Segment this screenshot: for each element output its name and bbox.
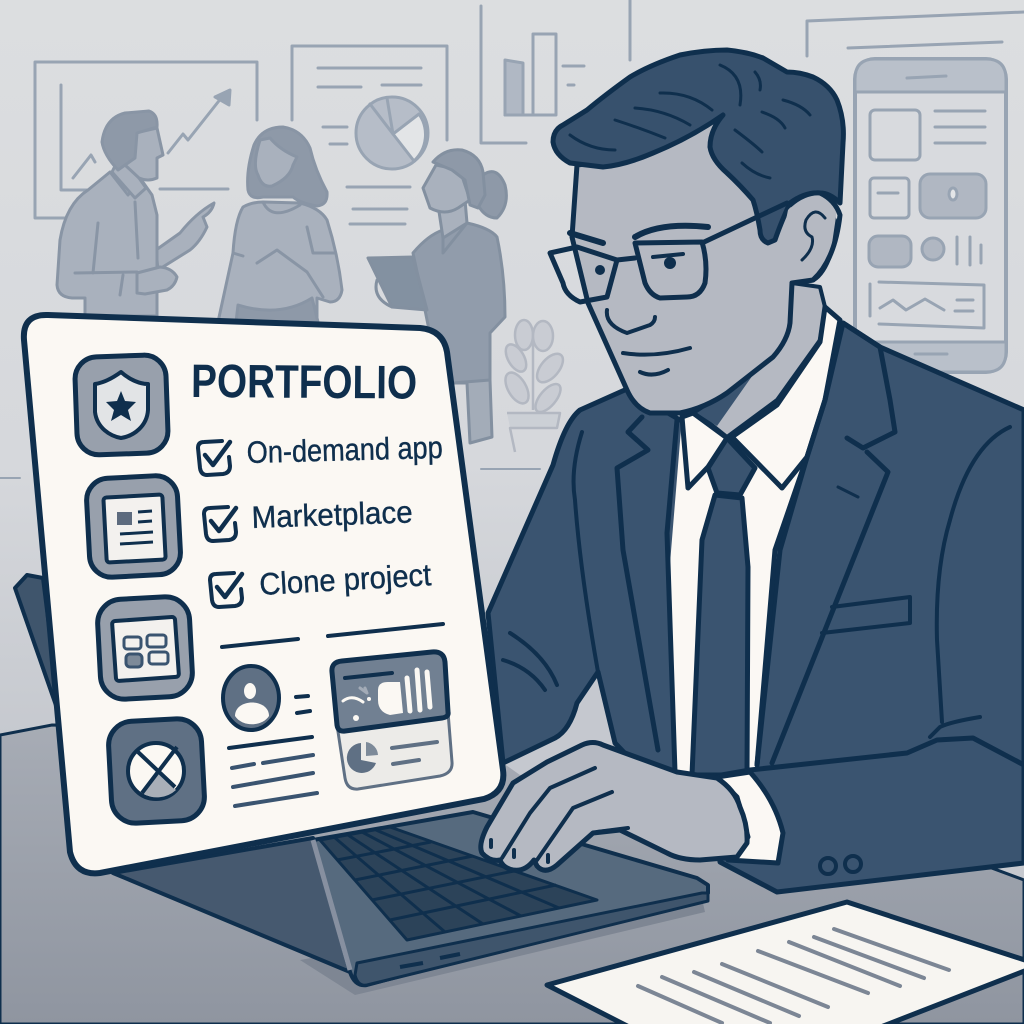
hair: [248, 127, 327, 206]
man figure: [488, 50, 1024, 892]
wall chart board: [35, 62, 257, 218]
checklist item: on-demand app: On-demand app: [246, 430, 443, 470]
suit jacket: [488, 323, 1024, 800]
neck: [112, 160, 146, 198]
background plant: [501, 320, 568, 452]
fingernails: [491, 840, 548, 862]
grid icon: [96, 596, 194, 700]
bar chart frame: [481, 0, 630, 143]
hand on keyboard: [481, 742, 783, 870]
shirt: [57, 172, 157, 316]
eyes: [595, 254, 683, 275]
hair: [102, 111, 157, 170]
laptop base left: [113, 838, 350, 972]
skirt and legs: [440, 330, 492, 443]
laptop base: [313, 812, 708, 985]
ponytail: [478, 172, 506, 218]
face: [255, 138, 297, 186]
sleeve buttons: [820, 856, 861, 874]
keyboard: [320, 827, 597, 940]
paper on desk: [547, 902, 1024, 1024]
front hand: [137, 267, 177, 294]
hinge: [313, 840, 350, 970]
left jacket fold: [574, 432, 598, 672]
shirt: [667, 400, 825, 775]
checklist item: marketplace: [204, 494, 413, 541]
neck: [438, 200, 467, 238]
laptop: [15, 575, 708, 995]
profile block: [223, 666, 317, 806]
background office scene: [0, 0, 1024, 478]
buttonhole: [838, 487, 858, 497]
neck shadow: [697, 362, 762, 426]
finger lines: [502, 768, 628, 860]
laptop front lip: [355, 893, 708, 985]
divider lines: [222, 624, 443, 647]
heading: portfolio: PORTFOLIO: [191, 354, 417, 409]
dashboard card: [332, 652, 452, 789]
neck: [697, 283, 825, 437]
face: [125, 128, 163, 180]
ear: [780, 193, 840, 283]
tablet: [368, 257, 427, 310]
pie chart: [356, 97, 428, 169]
nose and mouth: [607, 310, 690, 375]
wall lines: [0, 469, 540, 478]
checklist item: clone project: Clone project: [258, 557, 432, 602]
shirt detail lines: [75, 202, 138, 295]
hair: [553, 50, 843, 243]
document icon: [85, 475, 182, 578]
top right frame: [807, 12, 1024, 56]
eyebrows: [570, 226, 708, 243]
shield icon: [74, 354, 169, 456]
shirt edges: [667, 420, 807, 772]
shirt cuff: [717, 772, 783, 863]
shirt collar: [682, 307, 840, 488]
right lapel: [757, 323, 895, 765]
pie chart poster: [292, 46, 447, 224]
sleeve folds: [503, 427, 1010, 757]
pocket: [822, 597, 910, 633]
checklist item: marketplace: Marketplace: [251, 494, 413, 535]
background person: man pointing: [57, 111, 214, 316]
paper text lines: [638, 929, 949, 1023]
laptop shadow: [300, 890, 705, 995]
top: [413, 223, 505, 384]
phone mockup: [855, 59, 1006, 372]
panel background: [24, 315, 503, 873]
ports: [400, 954, 460, 967]
skirt: [236, 298, 318, 322]
pointing arm: [156, 203, 214, 270]
left lapel: [617, 417, 658, 750]
top and arms: [218, 202, 342, 322]
hair: [433, 150, 485, 208]
background person: woman with tablet: [368, 150, 506, 443]
checklist item: on-demand app: [198, 430, 443, 475]
right sleeve: [710, 738, 1024, 892]
background person: woman centre: [218, 127, 342, 322]
portfolio panel: [24, 315, 503, 873]
checklist item: clone project: [210, 557, 432, 607]
face: [423, 165, 470, 212]
circle cross icon: [107, 718, 206, 824]
tie: [692, 438, 755, 775]
face: [572, 120, 837, 413]
laptop screen back: [15, 575, 110, 860]
desk surface: [0, 725, 1024, 1024]
light gap behind arm: [503, 672, 615, 775]
glasses: [550, 203, 787, 302]
hand shape: [481, 742, 747, 870]
